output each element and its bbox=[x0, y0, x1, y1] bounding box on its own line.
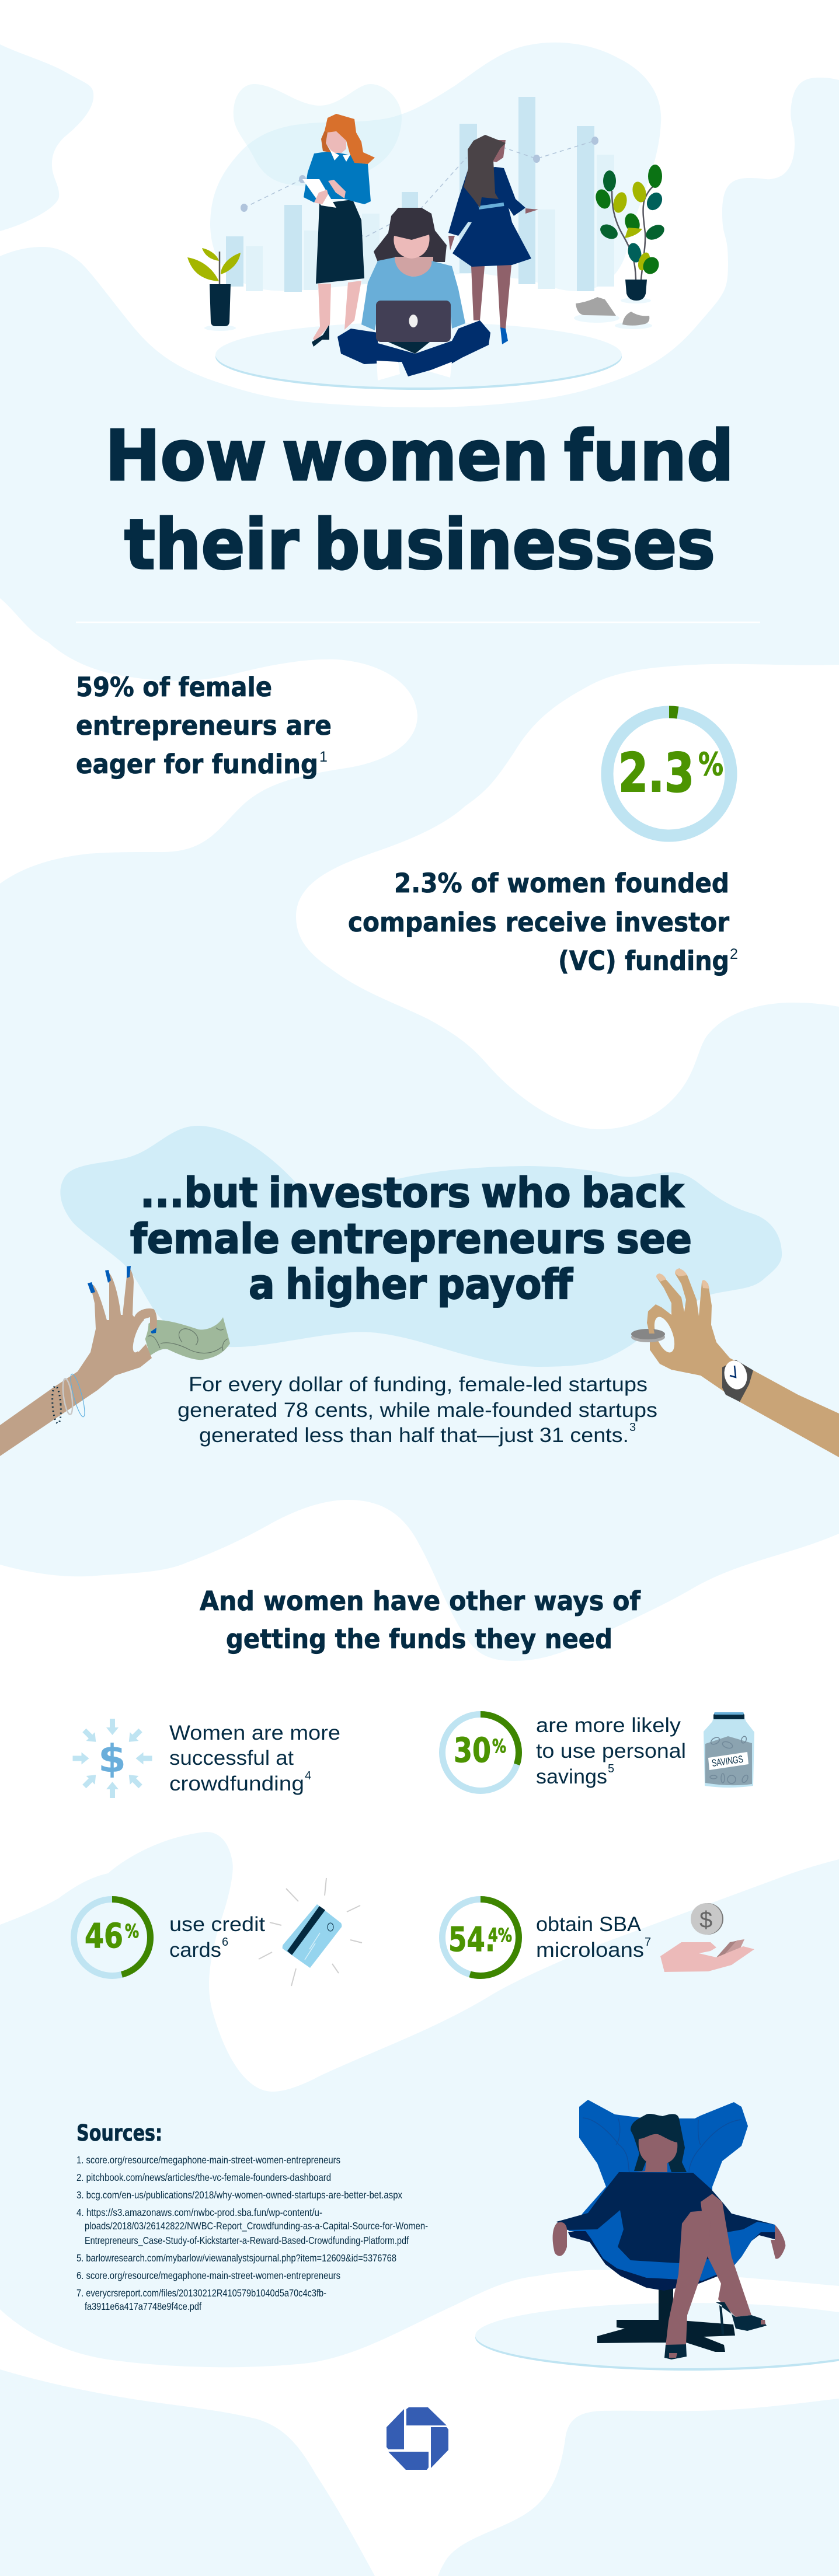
stat text: 2.3%: companies receive investor bbox=[348, 907, 730, 938]
sources: ploads/2018/03/26142822/NWBC-Report_Crowdfunding-as-a-Capital-Source-for-Women- bbox=[85, 2220, 428, 2232]
stat text: 59%: 59% of female bbox=[76, 672, 272, 703]
text: crowdfunding: crowdfunding bbox=[169, 1772, 304, 1795]
icon: dollar with arrows bbox=[72, 1719, 152, 1798]
heading: investors payoff bbox=[130, 1169, 692, 1308]
text: credit cards: use credit bbox=[169, 1913, 265, 1936]
donut chart: 30%: 30 bbox=[454, 1730, 491, 1770]
section heading: other ways: getting the funds they need bbox=[226, 1624, 612, 1654]
text: credit cards: cards bbox=[169, 1939, 221, 1961]
figure: woman in navy dress bbox=[448, 135, 538, 344]
paragraph: funding returns: generated 78 cents, while male-founded startups bbox=[177, 1399, 657, 1422]
logo: octagon bbox=[387, 2407, 448, 2470]
sources: 5. barlowresearch.com/mybarlow/viewanalystsjournal.php?item=12609&id=5376768 bbox=[76, 2252, 396, 2264]
stat text: 59%: eager for funding bbox=[76, 749, 318, 780]
donut chart: 30% bbox=[443, 1715, 518, 1790]
icon: rocks bbox=[576, 297, 649, 326]
icon: savings jar bbox=[704, 1712, 754, 1788]
donut chart: 54.4%: 54. bbox=[448, 1919, 495, 1959]
title bbox=[105, 416, 734, 585]
text: personal savings: savings bbox=[536, 1765, 607, 1788]
sources: Sources: bbox=[76, 2120, 162, 2146]
icon: hand receiving coin bbox=[660, 1903, 754, 1972]
icon: right potted plant bbox=[593, 165, 667, 301]
sources: Entrepreneurs_Case-Study-of-Kickstarter-a-Reward-Based-Crowdfunding-Platform.pdf bbox=[85, 2235, 409, 2247]
title: their businesses bbox=[124, 505, 715, 585]
text: personal savings bbox=[536, 1714, 686, 1788]
heading: investors payoff: ...but investors who back bbox=[140, 1169, 684, 1217]
paragraph: funding returns: generated less than half that—just 31 cents. bbox=[199, 1424, 629, 1447]
donut chart: 46%: % bbox=[125, 1920, 139, 1942]
icon: left potted plant bbox=[187, 248, 241, 326]
text: SBA microloans bbox=[536, 1913, 651, 1961]
text: personal savings: are more likely bbox=[536, 1714, 681, 1737]
stat text: 2.3% bbox=[348, 868, 738, 976]
text: credit cards: 6 bbox=[222, 1936, 228, 1949]
paragraph: funding returns: 3 bbox=[629, 1421, 636, 1434]
floor ellipse bbox=[204, 298, 652, 390]
stat text: 2.3%: 2.3% of women founded bbox=[394, 868, 729, 899]
title: How women fund bbox=[105, 416, 734, 497]
text: SBA microloans: microloans bbox=[536, 1939, 644, 1961]
hero illustration: women with charts bbox=[187, 43, 667, 390]
sources: 1. score.org/resource/megaphone-main-street-women-entrepreneurs bbox=[76, 2154, 340, 2166]
icon: hand receiving coin: $ bbox=[699, 1907, 712, 1933]
donut chart: 54.4% bbox=[443, 1899, 518, 1976]
sources: 4. https://s3.amazonaws.com/nwbc-prod.sba.fun/wp-content/u- bbox=[76, 2207, 322, 2218]
text: crowdfunding: 4 bbox=[305, 1769, 311, 1782]
icon: dollar with arrows: $ bbox=[98, 1736, 126, 1781]
hero backdrop blobs bbox=[210, 43, 661, 291]
sources: 2. pitchbook.com/news/articles/the-vc-female-founders-dashboard bbox=[76, 2172, 331, 2183]
sources bbox=[76, 2120, 428, 2312]
blob behind heading bbox=[60, 1126, 782, 1367]
donut chart: 2.3%: 2.3 bbox=[618, 742, 694, 804]
text: credit cards bbox=[169, 1913, 265, 1961]
text: SBA microloans: 7 bbox=[645, 1936, 651, 1949]
donut chart: 54.4%: 4% bbox=[488, 1924, 512, 1946]
stat text: 2.3%: (VC) funding bbox=[558, 945, 729, 976]
donut chart: 46%: 46 bbox=[85, 1916, 123, 1956]
stat text: 59%: entrepreneurs are bbox=[76, 710, 332, 741]
icon: credit card bbox=[259, 1878, 362, 1986]
icon: hand holding coin bbox=[631, 1268, 839, 1457]
donut chart: 2.3%: % bbox=[698, 746, 723, 783]
section heading: other ways bbox=[200, 1586, 640, 1654]
text: crowdfunding bbox=[169, 1722, 340, 1795]
bar chart bbox=[226, 97, 614, 292]
text: crowdfunding: successful at bbox=[169, 1747, 294, 1769]
text: crowdfunding: Women are more bbox=[169, 1722, 340, 1744]
donut chart: 30%: % bbox=[492, 1735, 506, 1757]
sources: fa3911e6a417a7748e9f4ce.pdf bbox=[85, 2301, 201, 2312]
figure: woman with clipboard bbox=[302, 114, 375, 347]
heading: investors payoff: a higher payoff bbox=[249, 1261, 573, 1308]
heading: investors payoff: female entrepreneurs see bbox=[130, 1215, 692, 1263]
sources: 3. bcg.com/en-us/publications/2018/why-women-owned-startups-are-better-bet.aspx bbox=[76, 2189, 402, 2201]
paragraph: funding returns bbox=[177, 1373, 657, 1447]
text: SBA microloans: obtain SBA bbox=[536, 1913, 642, 1936]
stat text: 2.3%: 2 bbox=[730, 946, 738, 962]
text: personal savings: to use personal bbox=[536, 1740, 686, 1762]
section heading: other ways: And women have other ways of bbox=[200, 1586, 640, 1617]
donut chart: 2.3% bbox=[607, 712, 731, 836]
paragraph: funding returns: For every dollar of funding, female-led startups bbox=[189, 1373, 647, 1396]
stat text: 59%: 1 bbox=[319, 749, 328, 765]
icon: hand holding banknote bbox=[0, 1266, 230, 1456]
text: personal savings: 5 bbox=[608, 1762, 614, 1775]
figure: woman in blue chair bbox=[475, 2100, 839, 2371]
sources: 6. score.org/resource/megaphone-main-street-women-entrepreneurs bbox=[76, 2270, 340, 2281]
icon: savings jar: SAVINGS bbox=[711, 1754, 744, 1769]
sources: 7. everycrsreport.com/files/20130212R410579b1040d5a70c4c3fb- bbox=[76, 2287, 326, 2299]
donut chart: 46% bbox=[74, 1899, 151, 1976]
stat text: 59% bbox=[76, 672, 332, 780]
figure: woman with laptop bbox=[337, 208, 490, 381]
